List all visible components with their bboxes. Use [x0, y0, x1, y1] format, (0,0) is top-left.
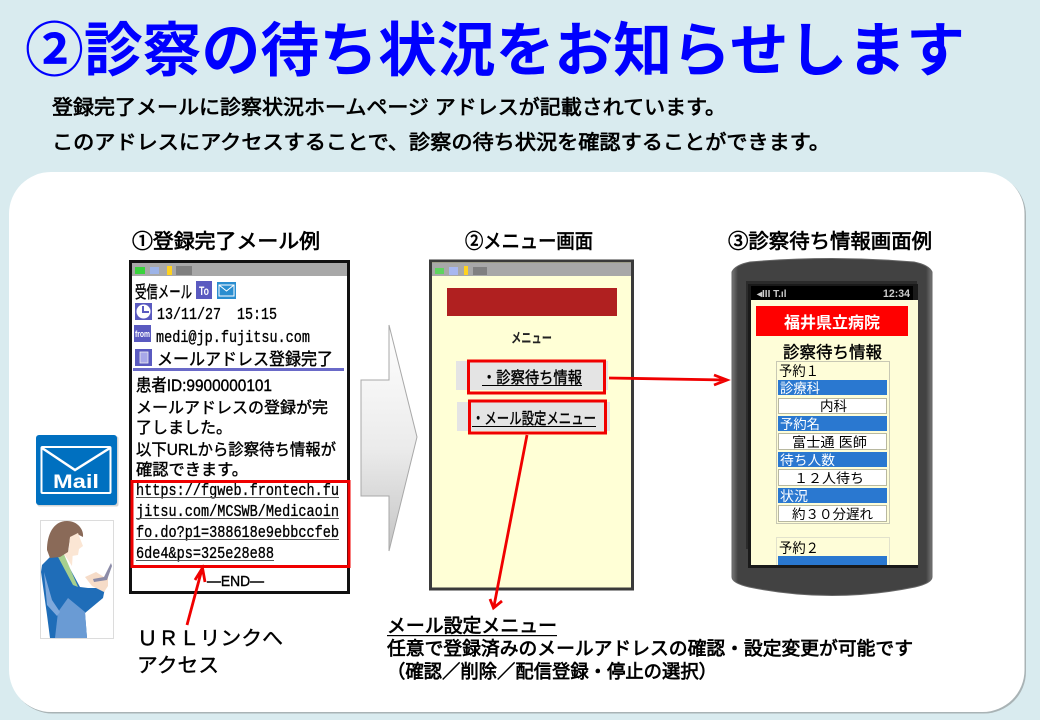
URL link: fo.do?p1=388618e9ebbccfeb	[136, 524, 339, 543]
menu item: waiting info	[456, 361, 608, 390]
mail body	[136, 376, 336, 479]
label: URL link access: アクセス	[137, 654, 219, 677]
mail body: メールアドレスの登録が完	[136, 399, 328, 417]
reservation 1 table	[776, 362, 890, 524]
mail body: 以下URLから診察待ち情報が	[136, 441, 336, 459]
note: mail settings menu: （確認／削除／配信登録・停止の選択）	[387, 661, 717, 682]
reservation 1 table: 約３０分遅れ	[792, 507, 873, 522]
status bar	[432, 263, 631, 276]
mail header: from	[135, 329, 150, 339]
mail header	[134, 281, 333, 369]
menu heading: メニュー	[511, 330, 552, 346]
hospital name banner	[756, 306, 908, 336]
highlight: URL red box	[132, 482, 349, 566]
reservation 2 table: 予約２	[779, 540, 819, 556]
highlight: waiting info red box	[468, 361, 604, 393]
menu item: waiting info: ・診察待ち情報	[482, 369, 582, 387]
mail body: 了しました。	[136, 419, 232, 437]
reservation 2 table	[776, 538, 890, 565]
menu item: mail settings	[457, 402, 610, 431]
menu item: mail settings: ・メール設定メニュー	[472, 410, 596, 428]
intro text	[52, 96, 830, 154]
heading: menu screen: ②メニュー画面	[465, 230, 593, 253]
label: URL link access	[137, 627, 283, 677]
reservation 1 table: １２人待ち	[794, 471, 864, 486]
mail header: medi@jp.fujitsu.com	[156, 329, 310, 348]
highlight: mail settings red box	[470, 401, 606, 433]
URL link: 6de4&ps=325e28e88	[136, 545, 274, 564]
arrow: to waiting info screen	[609, 375, 727, 385]
reservation 1 table: 予約１	[779, 363, 819, 379]
phone 2: menu screen	[430, 261, 632, 589]
heading: registration mail example: ①登録完了メール例	[132, 230, 320, 253]
phone 1: registration mail	[130, 262, 348, 592]
icon: woman using phone	[40, 520, 114, 638]
status bar	[132, 263, 347, 276]
phone 3: waiting info screen: ◂III T.ıl	[756, 289, 787, 300]
mail header: 13/11/27 15:15	[157, 306, 277, 325]
arrow: to URL link	[187, 568, 205, 625]
screen	[751, 300, 918, 565]
icon: mail	[36, 435, 118, 506]
phone 3: waiting info screen	[732, 258, 932, 596]
hospital banner	[447, 288, 617, 316]
icon: mail: Mail	[53, 472, 99, 493]
hospital name banner: 福井県立病院	[784, 314, 880, 332]
mail header: メールアドレス登録完了	[157, 350, 333, 369]
URL link: jitsu.com/MCSWB/Medicaoin	[136, 503, 339, 522]
end marker: —END—	[207, 573, 264, 590]
intro text: 登録完了メールに診察状況ホームページ アドレスが記載されています。	[52, 96, 726, 119]
arrow: large gray step arrow	[361, 325, 417, 551]
URL link: https://fgweb.frontech.fu	[136, 482, 339, 501]
mail body: 確認できます。	[136, 461, 248, 479]
reservation 1 table: 状況	[780, 489, 809, 504]
reservation 1 table: 予約名	[780, 417, 820, 432]
label: URL link access: ＵＲＬリンクへ	[137, 627, 283, 650]
panel: main white card	[9, 172, 1026, 714]
reservation 1 table: 待ち人数	[780, 453, 836, 468]
mail header: To	[199, 284, 209, 298]
note: mail settings menu: 任意で登録済みのメールアドレスの確認・設定変更が可能です	[387, 638, 913, 659]
reservation 1 table: 富士通 医師	[792, 435, 867, 450]
phone 3: waiting info screen: 12:34	[883, 288, 911, 300]
reservation 1 table: 診療科	[780, 381, 820, 396]
reservation 1 table: 内科	[820, 399, 848, 414]
mail body: 患者ID:9900000101	[136, 376, 272, 395]
note: mail settings menu	[387, 615, 913, 682]
intro text: このアドレスにアクセスすることで、診察の待ち状況を確認することができます。	[52, 131, 830, 154]
title: ②診察の待ち状況をお知らせします	[25, 18, 965, 84]
heading: waiting info screen example: ③診察待ち情報画面例	[728, 230, 932, 253]
mail header: 受信メール	[135, 283, 192, 302]
URL link	[136, 482, 339, 564]
screen heading: 診察待ち情報	[783, 343, 882, 362]
arrow: to mail settings note	[490, 435, 527, 608]
note: mail settings menu: メール設定メニュー	[387, 615, 557, 637]
